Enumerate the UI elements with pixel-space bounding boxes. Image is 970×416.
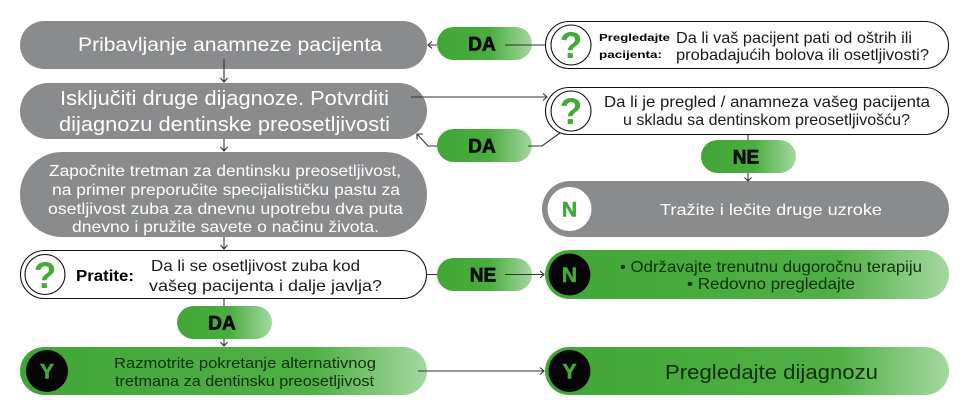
panel: obtain patient history: Pribavljanje anamneze pacijenta <box>78 35 382 56</box>
panel: review diagnosis: Pregledajte dijagnozu <box>665 362 878 384</box>
panel: start treatment: Započnite tretman za dentinsku preosetljivost, <box>49 163 401 180</box>
arrow: examination question via DA to diagnosis <box>417 133 560 146</box>
icon: N badge: N <box>562 264 577 287</box>
panel: start treatment: na primer preporučite specijalističku pastu za <box>52 182 400 199</box>
panel: exclude other diagnoses: dijagnozu dentinske preosetljivosti <box>59 114 390 136</box>
panel: examination consistent question <box>546 88 948 134</box>
badge: DA top <box>437 27 532 60</box>
icon: question mark: ? <box>560 91 582 132</box>
panel: obtain patient history <box>20 21 427 69</box>
panel: follow-up question: vašeg pacijenta i dalje javlja? <box>149 278 382 295</box>
arrow: first to second step <box>220 59 228 82</box>
badge: NE right: NE <box>733 148 759 168</box>
panel: exclude other diagnoses: Isključiti druge dijagnoze. Potvrditi <box>60 88 389 110</box>
icon: N badge <box>548 254 590 296</box>
panel: examine patient question <box>546 22 948 68</box>
icon: question mark <box>551 25 591 66</box>
panel: examine patient question: Da li vaš pacijent pati od oštrih ili <box>676 30 912 47</box>
arrow: third step to follow-up <box>220 237 228 249</box>
panel: examination consistent question: Da li je pregled / anamneza vašeg pacijenta <box>604 94 930 111</box>
badge: DA bottom <box>177 306 272 339</box>
icon: question mark: ? <box>560 25 582 66</box>
panel: follow-up question <box>20 250 426 298</box>
badge: NE left <box>437 258 532 291</box>
icon: Y badge <box>548 350 590 392</box>
panel: consider alternative treatment: Razmotrite pokretanje alternativnog <box>114 355 376 372</box>
panel: start treatment: dnevno i pružite savete o načinu života. <box>72 219 379 236</box>
arrow: DA to alternative treatment <box>220 339 228 346</box>
panel: examine patient question: probadajućih bolova ili osetljivosti? <box>676 47 929 64</box>
badge: DA top: DA <box>468 34 496 56</box>
arrow: NE to other causes <box>744 173 752 181</box>
arrow: second to third step <box>220 139 228 151</box>
panel: maintain therapy: • Redovno pregledajte <box>687 276 855 293</box>
badge: DA bottom: DA <box>208 314 236 334</box>
badge: NE right <box>701 140 796 173</box>
arrow: question to NE <box>747 135 749 140</box>
icon: question mark: ? <box>34 255 56 296</box>
panel: examine patient question: Pregledajte <box>599 33 671 44</box>
panel: follow-up question: Pratite: <box>76 268 134 285</box>
panel: follow-up question: Da li se osetljivost zuba kod <box>151 258 360 275</box>
icon: Y badge <box>26 350 68 392</box>
panel: examination consistent question: u skladu sa dentinskom preosetljivošću? <box>623 112 910 129</box>
arrow: follow-up NE to maintain therapy <box>427 271 544 278</box>
icon: N badge <box>548 187 592 231</box>
icon: N badge: N <box>562 198 577 222</box>
panel: start treatment <box>20 152 427 237</box>
panel: seek other causes <box>542 181 949 237</box>
icon: Y badge: Y <box>40 360 54 384</box>
icon: question mark <box>25 254 65 296</box>
badge: DA middle: DA <box>468 136 496 158</box>
arrow: alternative treatment to review <box>418 368 544 374</box>
panel: exclude other diagnoses <box>20 83 427 139</box>
panel: maintain therapy <box>545 250 949 299</box>
arrow: follow-up to DA <box>223 299 225 306</box>
panel: consider alternative treatment <box>20 347 427 395</box>
icon: question mark <box>551 91 591 132</box>
panel: maintain therapy: • Održavajte trenutnu dugoročnu terapiju <box>620 259 922 276</box>
icon: Y badge: Y <box>562 360 577 384</box>
badge: DA middle <box>437 129 532 162</box>
arrow: DA to patient history <box>428 42 545 48</box>
panel: review diagnosis <box>545 347 949 395</box>
panel: examine patient question: pacijenta: <box>599 50 662 61</box>
panel: start treatment: osetljivost zuba za dnevnu upotrebu dva puta <box>48 201 403 218</box>
badge: NE left: NE <box>470 266 496 286</box>
panel: consider alternative treatment: tretmana za dentinsku preosetljivost <box>115 373 375 390</box>
arrow: diagnosis to examination question <box>411 94 547 100</box>
panel: seek other causes: Tražite i lečite druge uzroke <box>660 202 882 219</box>
